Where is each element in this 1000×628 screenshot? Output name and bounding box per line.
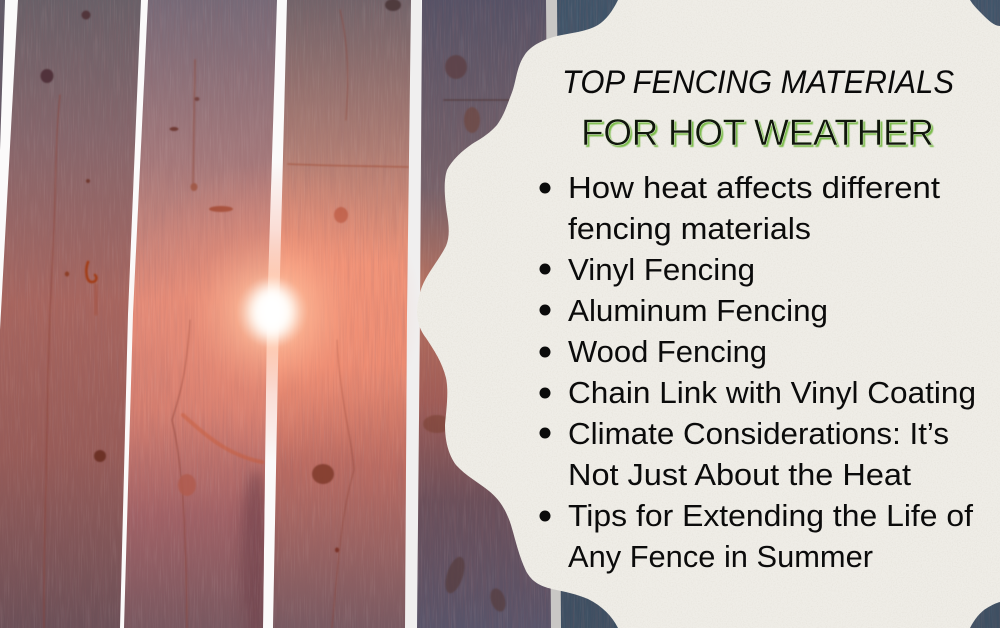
item: heat effects: How heat affects different xyxy=(568,171,941,205)
item: wood: Wood Fencing xyxy=(568,335,767,369)
dark patch on plank 2 xyxy=(241,470,269,628)
item: climate: Climate Considerations: It’s xyxy=(568,417,949,451)
title line 1: TOP FENCING MATERIALS xyxy=(562,64,954,100)
item: tips: Any Fence in Summer xyxy=(568,540,873,574)
item: aluminum: Aluminum Fencing xyxy=(568,294,828,328)
plank 0 sliver xyxy=(0,0,5,150)
paper blob panel xyxy=(410,0,1000,628)
item: tips: Tips for Extending the Life of xyxy=(568,499,974,533)
item: heat effects xyxy=(540,171,941,246)
sun glow xyxy=(122,162,422,462)
item: climate: Not Just About the Heat xyxy=(568,458,912,492)
bullet list xyxy=(540,171,976,574)
item: vinyl: Vinyl Fencing xyxy=(568,253,755,287)
item: heat effects: fencing materials xyxy=(568,212,811,246)
title line 2 with green shadow: FOR HOT WEATHER xyxy=(581,112,934,153)
item: chain link: Chain Link with Vinyl Coating xyxy=(568,376,976,410)
plank 5 xyxy=(557,0,1000,628)
plank 4 xyxy=(417,0,551,628)
item: tips xyxy=(540,499,974,574)
item: climate xyxy=(540,417,949,492)
plank 2 xyxy=(124,0,277,628)
plank 3 xyxy=(273,0,411,628)
sun core xyxy=(252,286,292,338)
wood knots and cracks xyxy=(40,0,510,628)
title line 2 with green shadow: FOR HOT WEATHER xyxy=(583,114,936,155)
plank 1 xyxy=(0,0,141,628)
